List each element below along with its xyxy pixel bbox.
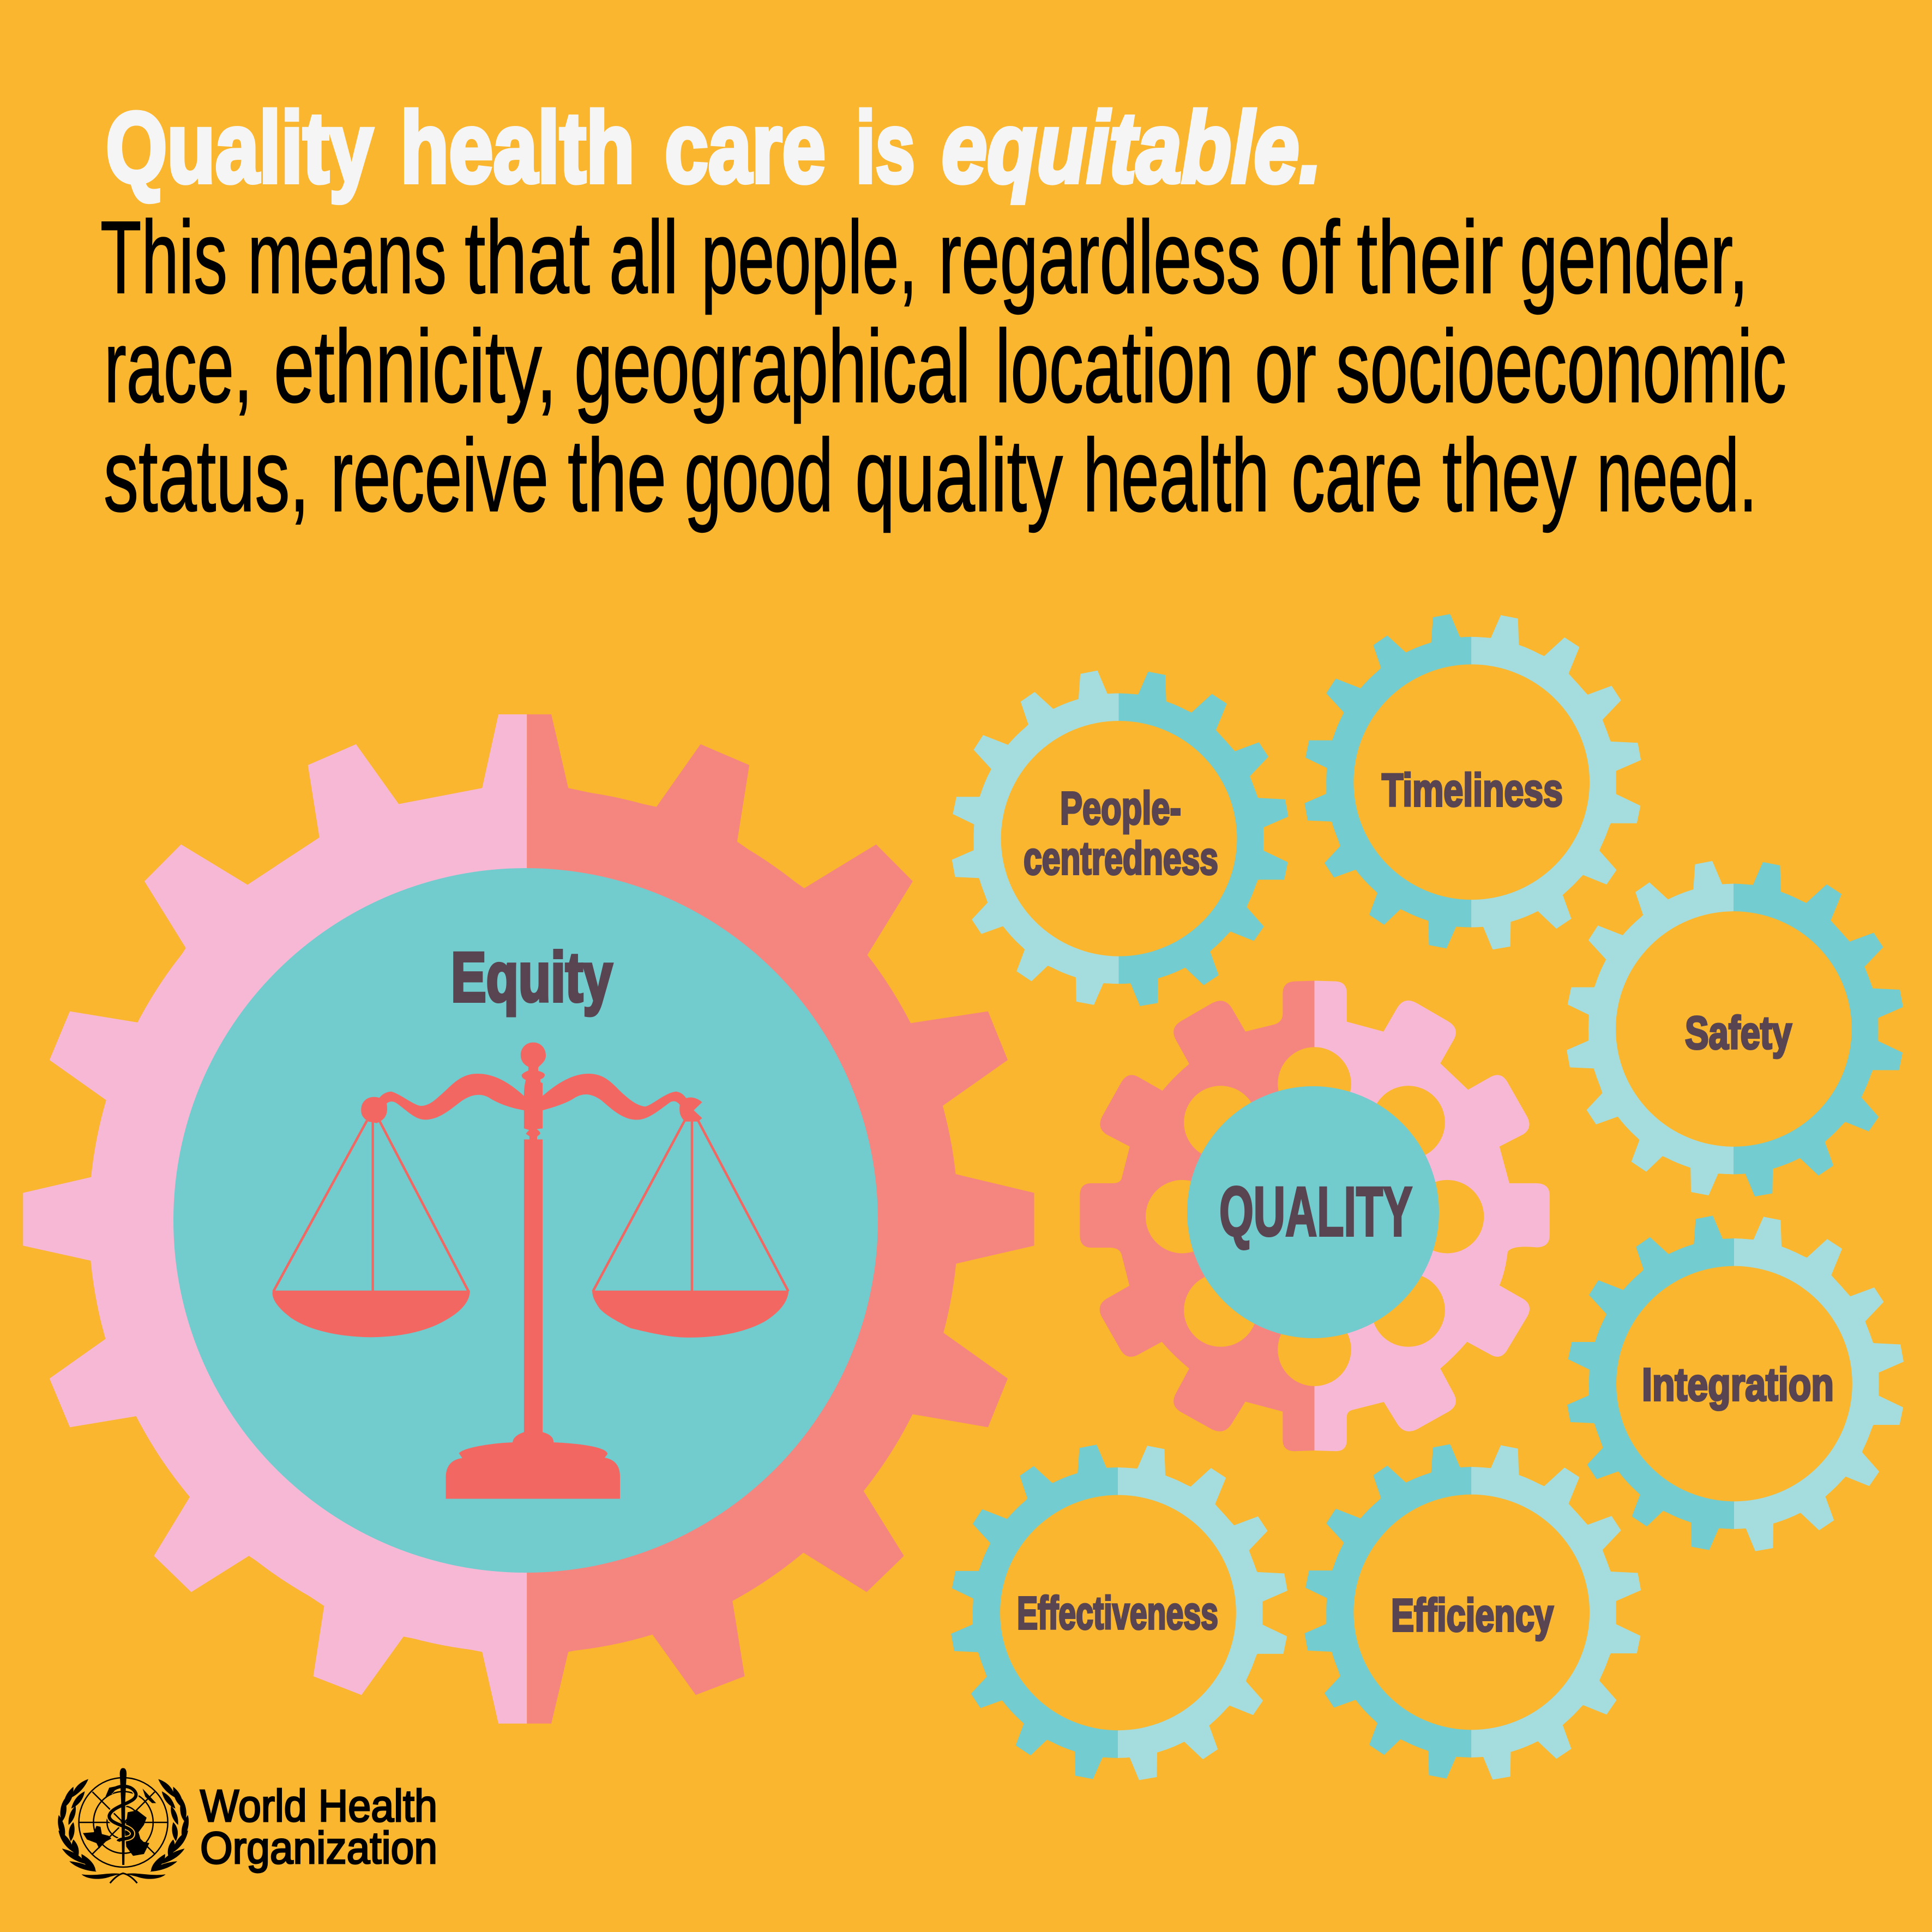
icon: balance scale xyxy=(273,1043,789,1498)
gear: integration xyxy=(1567,1215,1904,1551)
quality label: QUALITY xyxy=(1219,1173,1412,1251)
intro line 1: their xyxy=(1357,200,1503,315)
intro line 3: need. xyxy=(1597,418,1757,533)
intro line 2 xyxy=(104,309,1786,424)
intro line 1: means xyxy=(248,200,447,315)
intro line 3: they xyxy=(1442,418,1576,533)
intro line 3: care xyxy=(1291,418,1423,533)
central quality gear xyxy=(1080,980,1550,1451)
gear left half xyxy=(23,714,527,1724)
intro line 3 xyxy=(104,418,1757,533)
label: centredness xyxy=(1024,833,1218,884)
intro line 3: quality xyxy=(855,418,1063,533)
logo: World Health Organization xyxy=(58,1768,437,1883)
organization name: World Health xyxy=(200,1780,437,1831)
intro line 1: regardless xyxy=(938,200,1261,315)
intro line 1: that xyxy=(465,200,590,315)
intro line 2: geographical xyxy=(574,309,971,424)
gear: timeliness xyxy=(1304,614,1641,949)
gear: people-centredness xyxy=(952,671,1289,1006)
title: Quality xyxy=(106,91,373,203)
intro line 1: of xyxy=(1280,200,1340,315)
title: is xyxy=(856,91,915,203)
teal centre circle xyxy=(1187,1086,1439,1338)
intro line 1: all xyxy=(609,200,678,315)
intro line 2: location xyxy=(995,309,1233,424)
teal centre circle xyxy=(173,868,878,1573)
gear left half xyxy=(1080,980,1314,1451)
intro line 3: good xyxy=(684,418,833,533)
label: People- xyxy=(1060,783,1181,834)
gear right half xyxy=(527,714,1034,1724)
intro line 2: or xyxy=(1255,309,1316,424)
intro line 3: receive xyxy=(330,418,549,533)
intro line 2: race, xyxy=(104,309,252,424)
label: Safety xyxy=(1685,1007,1792,1058)
gear: efficiency xyxy=(1304,1444,1641,1780)
intro line 3: health xyxy=(1083,418,1269,533)
label: Efficiency xyxy=(1391,1590,1554,1641)
title xyxy=(106,91,1322,203)
intro line 2: ethnicity, xyxy=(274,309,557,424)
intro line 3: the xyxy=(568,418,666,533)
intro line 3: status, xyxy=(104,418,309,533)
title: equitable. xyxy=(942,91,1322,203)
intro line 1 xyxy=(100,200,1748,315)
organization name xyxy=(200,1780,437,1873)
icon: WHO emblem xyxy=(58,1768,189,1883)
title: health xyxy=(400,91,635,203)
label: Timeliness xyxy=(1382,765,1563,816)
intro line 1: people, xyxy=(701,200,917,315)
label: Integration xyxy=(1642,1359,1834,1410)
equity label: Equity xyxy=(451,938,612,1016)
intro line 1: This xyxy=(100,200,227,315)
intro line 1: gender, xyxy=(1520,200,1748,315)
intro text xyxy=(100,200,1786,533)
title: care xyxy=(665,91,826,203)
label xyxy=(1024,783,1218,884)
organization name: Organization xyxy=(200,1822,437,1873)
large equity gear xyxy=(23,714,1034,1724)
gear holes xyxy=(1146,1047,1484,1386)
gear: effectiveness xyxy=(951,1445,1287,1780)
label: Effectiveness xyxy=(1017,1587,1218,1639)
gear right half xyxy=(1314,980,1550,1451)
gear: safety xyxy=(1567,861,1903,1196)
